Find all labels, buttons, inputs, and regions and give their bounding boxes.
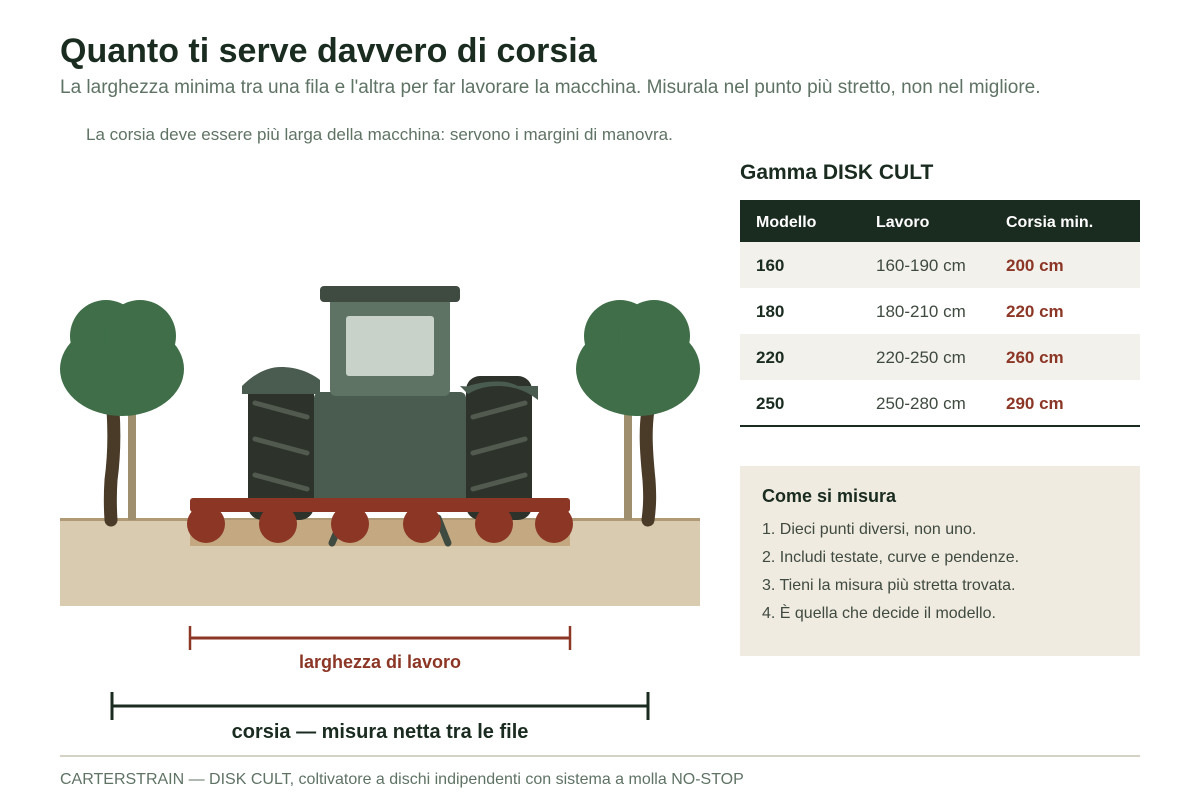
left wheel	[248, 376, 314, 520]
row 160	[740, 242, 1140, 288]
lane width dimension	[112, 692, 648, 720]
cultivator discs	[187, 505, 573, 543]
row 160: 160-190 cm	[876, 256, 966, 275]
step 3: 3. Tieni la misura più stretta trovata.	[762, 577, 1015, 594]
ground	[60, 518, 700, 606]
diagram caption: La corsia deve essere più larga della macchina: servono i margini di manovra.	[86, 125, 673, 144]
left fender	[242, 367, 320, 394]
machine body	[314, 392, 466, 512]
row 160: 200 cm	[1006, 256, 1064, 275]
row 180: 180	[756, 302, 784, 321]
machine struts	[332, 518, 448, 543]
row 220: 220	[756, 348, 784, 367]
row 180: 220 cm	[1006, 302, 1064, 321]
row 250	[756, 394, 1064, 413]
row 180: 180-210 cm	[876, 302, 966, 321]
cab window	[346, 316, 434, 376]
panel heading: Come si misura	[762, 486, 896, 506]
table bottom rule	[740, 425, 1140, 427]
working width dimension	[190, 626, 570, 650]
table: models	[740, 200, 1140, 427]
row 220: 260 cm	[1006, 348, 1064, 367]
table header: Lavoro	[876, 214, 929, 231]
cab	[330, 296, 450, 396]
row 250: 250	[756, 394, 784, 413]
row 220: 220-250 cm	[876, 348, 966, 367]
step 4: 4. È quella che decide il modello.	[762, 605, 996, 622]
right tree	[576, 300, 700, 520]
row 250: 290 cm	[1006, 394, 1064, 413]
panel: how to measure	[740, 466, 1140, 656]
footer source note: CARTERSTRAIN — DISK CULT, coltivatore a dischi indipendenti con sistema a molla NO-STOP	[60, 771, 744, 788]
cultivator frame	[190, 498, 570, 512]
row 180	[756, 302, 1064, 321]
working width label: larghezza di lavoro	[299, 652, 461, 672]
right wheel	[466, 376, 532, 520]
step 1: 1. Dieci punti diversi, non uno.	[762, 521, 976, 538]
right fender	[460, 382, 538, 400]
table header	[740, 200, 1140, 242]
table header: Modello	[756, 214, 816, 231]
row 250: 250-280 cm	[876, 394, 966, 413]
cab roof	[320, 286, 460, 302]
table header: Corsia min.	[1006, 214, 1093, 231]
step 2: 2. Includi testate, curve e pendenze.	[762, 549, 1019, 566]
row 220	[740, 334, 1140, 380]
title: Quanto ti serve davvero di corsia	[60, 32, 597, 70]
subtitle: La larghezza minima tra una fila e l'altra per far lavorare la macchina. Misurala nel punto più stretto, non nel migliore.	[60, 77, 1041, 98]
left tree	[60, 300, 184, 520]
lane width label: corsia — misura netta tra le file	[232, 721, 528, 743]
table heading: Gamma DISK CULT	[740, 161, 933, 184]
row 160: 160	[756, 256, 784, 275]
